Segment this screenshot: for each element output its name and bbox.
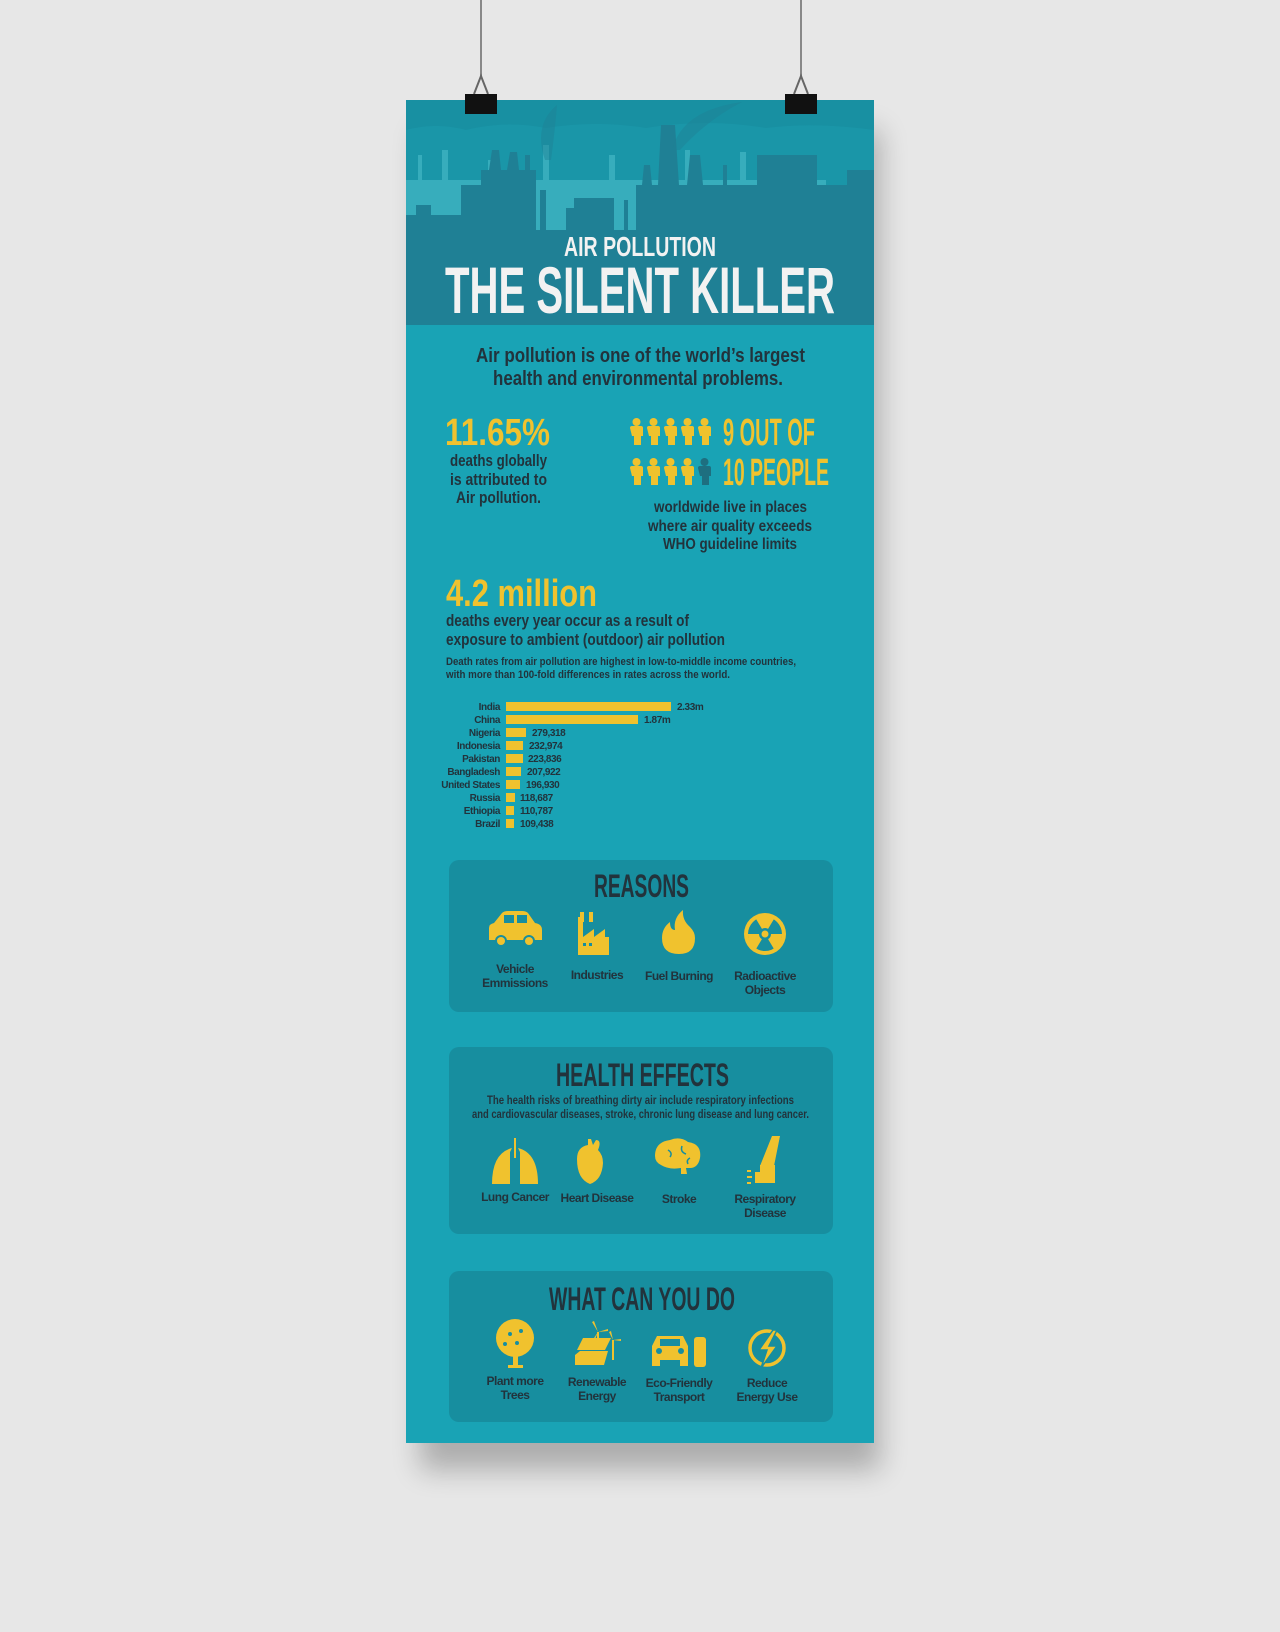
panel: reasons: REASONS <box>594 868 689 904</box>
stat: 11.65%: 11.65% <box>445 412 550 454</box>
intro text: Air pollution is one of the world’s largest <box>476 345 805 367</box>
icon: eco transport <box>652 1336 706 1367</box>
icon: lungs <box>492 1138 538 1184</box>
panel: health effects: and cardiovascular diseases, stroke, chronic lung disease and lung cancer. <box>472 1107 809 1121</box>
bar chart: Pakistan <box>462 754 500 765</box>
panel: health effects: Heart Disease <box>561 1191 634 1205</box>
panel: what can you do <box>449 1271 833 1422</box>
panel: what can you do: Renewable <box>568 1375 627 1389</box>
intro text: health and environmental problems. <box>493 368 783 390</box>
stat: 4.2 million: with more than 100-fold differences in rates across the world. <box>445 669 730 681</box>
stat: 4.2 million <box>445 573 796 681</box>
panel: reasons: Fuel Burning <box>645 969 713 983</box>
panel: reasons <box>449 860 833 1012</box>
icon: tree <box>496 1319 534 1368</box>
bar chart: India <box>479 702 501 713</box>
stat: 9 out of 10 people: 10 PEOPLE <box>723 452 829 494</box>
panel: what can you do: Energy <box>578 1389 617 1403</box>
bar chart: 279,318 <box>532 728 566 739</box>
stat: 11.65% <box>445 412 550 507</box>
panel: health effects <box>449 1047 833 1234</box>
panel: what can you do: Eco-Friendly <box>646 1376 713 1390</box>
bar chart: Russia <box>470 793 501 804</box>
bar chart: 109,438 <box>520 819 554 830</box>
bar chart: United States <box>441 780 501 791</box>
bar chart <box>441 702 704 830</box>
icon: reduce energy <box>750 1330 784 1368</box>
icon: radioactive <box>744 913 786 955</box>
bar chart: 110,787 <box>520 806 554 817</box>
title: AIR POLLUTION <box>564 231 716 262</box>
bar chart: Ethiopia <box>464 806 501 817</box>
panel: what can you do: Energy Use <box>736 1390 798 1404</box>
stat: 9 out of 10 people <box>630 412 829 553</box>
stat: 4.2 million: 4.2 million <box>446 573 597 615</box>
title: THE SILENT KILLER <box>445 253 835 327</box>
icon: car <box>489 911 542 947</box>
panel: reasons: Emmissions <box>482 976 549 990</box>
stat: 11.65%: Air pollution. <box>456 488 541 507</box>
stat: 4.2 million: exposure to ambient (outdoor) air pollution <box>446 630 725 649</box>
bar chart: 223,836 <box>528 754 562 765</box>
stat: 9 out of 10 people: WHO guideline limits <box>663 536 797 553</box>
panel: reasons: Objects <box>745 983 786 997</box>
panel: health effects: The health risks of breathing dirty air include respiratory infections <box>487 1093 794 1107</box>
stat: 11.65%: deaths globally <box>450 451 547 470</box>
people icons <box>630 418 711 485</box>
bar chart: Brazil <box>475 819 501 830</box>
bar chart: Bangladesh <box>447 767 500 778</box>
icon: heart <box>577 1139 603 1184</box>
icon: factory <box>578 912 609 955</box>
stat: 9 out of 10 people: 9 OUT OF <box>723 412 815 454</box>
panel: what can you do: Trees <box>501 1388 530 1402</box>
title <box>445 231 835 327</box>
icon: flame <box>662 910 695 954</box>
stat: 9 out of 10 people: worldwide live in places <box>653 499 807 516</box>
bar chart: Nigeria <box>469 728 501 739</box>
panel: what can you do: WHAT CAN YOU DO <box>549 1281 735 1317</box>
panel: health effects: HEALTH EFFECTS <box>556 1057 729 1093</box>
header band with skyline <box>406 100 912 325</box>
icon: renewable energy <box>575 1321 621 1365</box>
panel: health effects: Lung Cancer <box>481 1190 550 1204</box>
icon: brain <box>655 1138 700 1174</box>
bar chart: 118,687 <box>520 793 554 804</box>
bar chart: Indonesia <box>457 741 501 752</box>
poster shadow <box>420 130 880 1470</box>
stat: 9 out of 10 people: where air quality exceeds <box>647 518 812 535</box>
panel: health effects: Disease <box>744 1206 787 1220</box>
panel: health effects: Respiratory <box>734 1192 796 1206</box>
intro text <box>476 345 805 390</box>
bar chart: 207,922 <box>527 767 561 778</box>
hanging strings and clips <box>465 0 817 114</box>
bar chart: China <box>474 715 501 726</box>
panel: what can you do: Plant more <box>486 1374 544 1388</box>
bar chart: 232,974 <box>529 741 563 752</box>
bar chart: 2.33m <box>677 702 704 713</box>
bar chart: 196,930 <box>526 780 560 791</box>
panel: reasons: Industries <box>571 968 624 982</box>
panel: what can you do: Reduce <box>747 1376 788 1390</box>
bar chart: 1.87m <box>644 715 671 726</box>
stat: 4.2 million: Death rates from air pollution are highest in low-to-middle income countries, <box>446 656 796 668</box>
panel: health effects: Stroke <box>662 1192 697 1206</box>
poster <box>406 100 912 1443</box>
icon: inhaler <box>747 1136 780 1184</box>
panel: reasons: Vehicle <box>496 962 535 976</box>
stat: 4.2 million: deaths every year occur as a result of <box>446 611 689 630</box>
panel: reasons: Radioactive <box>734 969 797 983</box>
panel: what can you do: Transport <box>654 1390 705 1404</box>
stat: 11.65%: is attributed to <box>450 470 547 489</box>
